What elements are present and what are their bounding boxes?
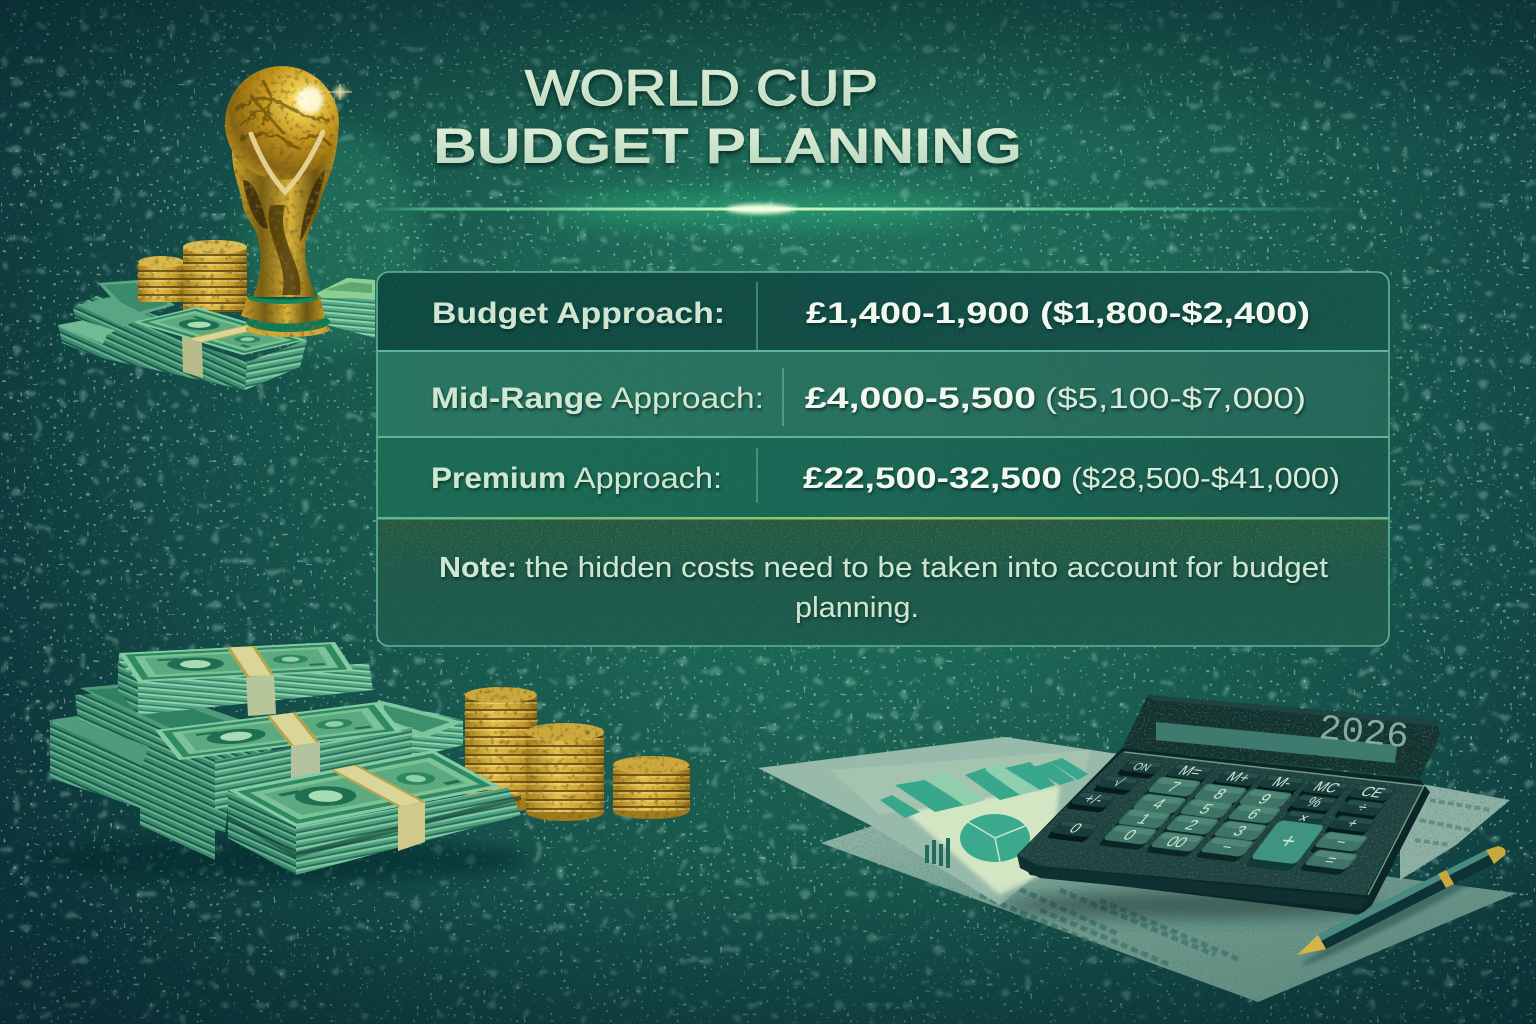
pie chart (960, 814, 1030, 862)
front stack with band (228, 750, 521, 875)
row: budget approach (432, 282, 1310, 350)
calculator keys: 0 (1065, 821, 1085, 836)
calculator keys: M+ (1222, 770, 1254, 786)
calculator keys: √ (1109, 776, 1128, 790)
trophy arms (251, 132, 323, 192)
right document (1400, 780, 1510, 880)
cash stacks on the left (58, 280, 175, 358)
illustration: calculator, papers and pen (758, 695, 1517, 1002)
row: mid-range approach: £4,000-5,500 (805, 382, 1036, 415)
calculator keys: 00 (1162, 833, 1192, 851)
calculator keys: − (1216, 839, 1238, 855)
calculator keys: 2 (1181, 817, 1203, 833)
calculator keys: 0 (1119, 827, 1141, 843)
illustration: cash stacks and gold coins (30, 642, 690, 882)
trophy globe (225, 66, 339, 180)
calculator keys: 8 (1209, 786, 1231, 802)
note: planning. (795, 592, 919, 624)
row: premium approach: Approach: (574, 462, 722, 495)
sparkle (328, 84, 352, 100)
calculator keys: % (1302, 795, 1327, 810)
calculator (1000, 695, 1440, 919)
calculator keys: 6 (1243, 806, 1265, 822)
trophy (225, 66, 352, 337)
illustration: trophy with coins and cash (58, 66, 375, 390)
calculator keys: +/- (1079, 792, 1108, 808)
calculator keys: ON (1129, 762, 1153, 773)
row: budget approach: £1,400-1,900 ($1,800-$2,400) (806, 297, 1310, 330)
title (433, 60, 1022, 174)
title: BUDGET PLANNING (433, 118, 1022, 174)
upper document with bar chart (758, 737, 1125, 905)
cash bundle behind the trophy (317, 278, 375, 338)
calculator keys: 5 (1195, 801, 1217, 817)
calculator keys: 3 (1229, 823, 1251, 839)
glowing divider (370, 198, 1360, 220)
middle stack with band (140, 702, 412, 860)
row: premium approach: Premium (431, 462, 566, 495)
calculator keys: CE (1356, 785, 1388, 801)
row: budget approach: Budget Approach: (432, 297, 725, 330)
large plus key: + (1273, 829, 1303, 854)
calculator keys: − (1330, 834, 1352, 850)
front cash stack (97, 307, 307, 390)
pen (1297, 846, 1506, 970)
calculator keys: ÷ (1352, 800, 1373, 815)
gold coin stacks (465, 687, 690, 821)
bundle behind middle stack (372, 700, 463, 760)
calculator keys: 9 (1254, 791, 1276, 807)
display digits: 2026 (1317, 708, 1411, 758)
calculator keys: 4 (1148, 796, 1170, 812)
note: the hidden costs need to be taken into account for budget (525, 552, 1328, 584)
calculator keys: MC (1309, 780, 1343, 796)
row: premium approach: ($28,500-$41,000) (1071, 463, 1340, 495)
row: mid-range approach: ($5,100-$7,000) (1045, 383, 1306, 415)
calculator keys: 7 (1163, 779, 1185, 795)
note: Note: (439, 552, 517, 584)
trophy body (225, 66, 339, 297)
coin stacks (138, 240, 247, 312)
row: premium approach: £22,500-32,500 (803, 462, 1062, 495)
display (1156, 722, 1397, 763)
row: premium approach (431, 448, 1340, 503)
note (439, 552, 1328, 624)
trophy base (241, 296, 330, 337)
calculator keys: × (1293, 811, 1314, 826)
back stack with band (118, 642, 373, 716)
calculator keys: + (1342, 816, 1363, 831)
row: mid-range approach: Approach: (611, 382, 764, 415)
calculator keys (1046, 759, 1397, 875)
row: mid-range approach (431, 368, 1306, 426)
row: mid-range approach: Mid-Range (431, 382, 603, 415)
calculator display housing (1122, 695, 1440, 778)
calculator keys: 1 (1133, 811, 1155, 827)
panel: budget table (377, 272, 1389, 646)
title: WORLD CUP (525, 60, 878, 116)
large plus key (1245, 820, 1325, 872)
calculator body (1000, 891, 1380, 919)
calculator keys: M= (1174, 764, 1206, 780)
lower document (821, 815, 1517, 1002)
far-left bundles (50, 683, 280, 832)
calculator keys: = (1320, 852, 1342, 868)
calculator keys: M- (1268, 775, 1297, 791)
